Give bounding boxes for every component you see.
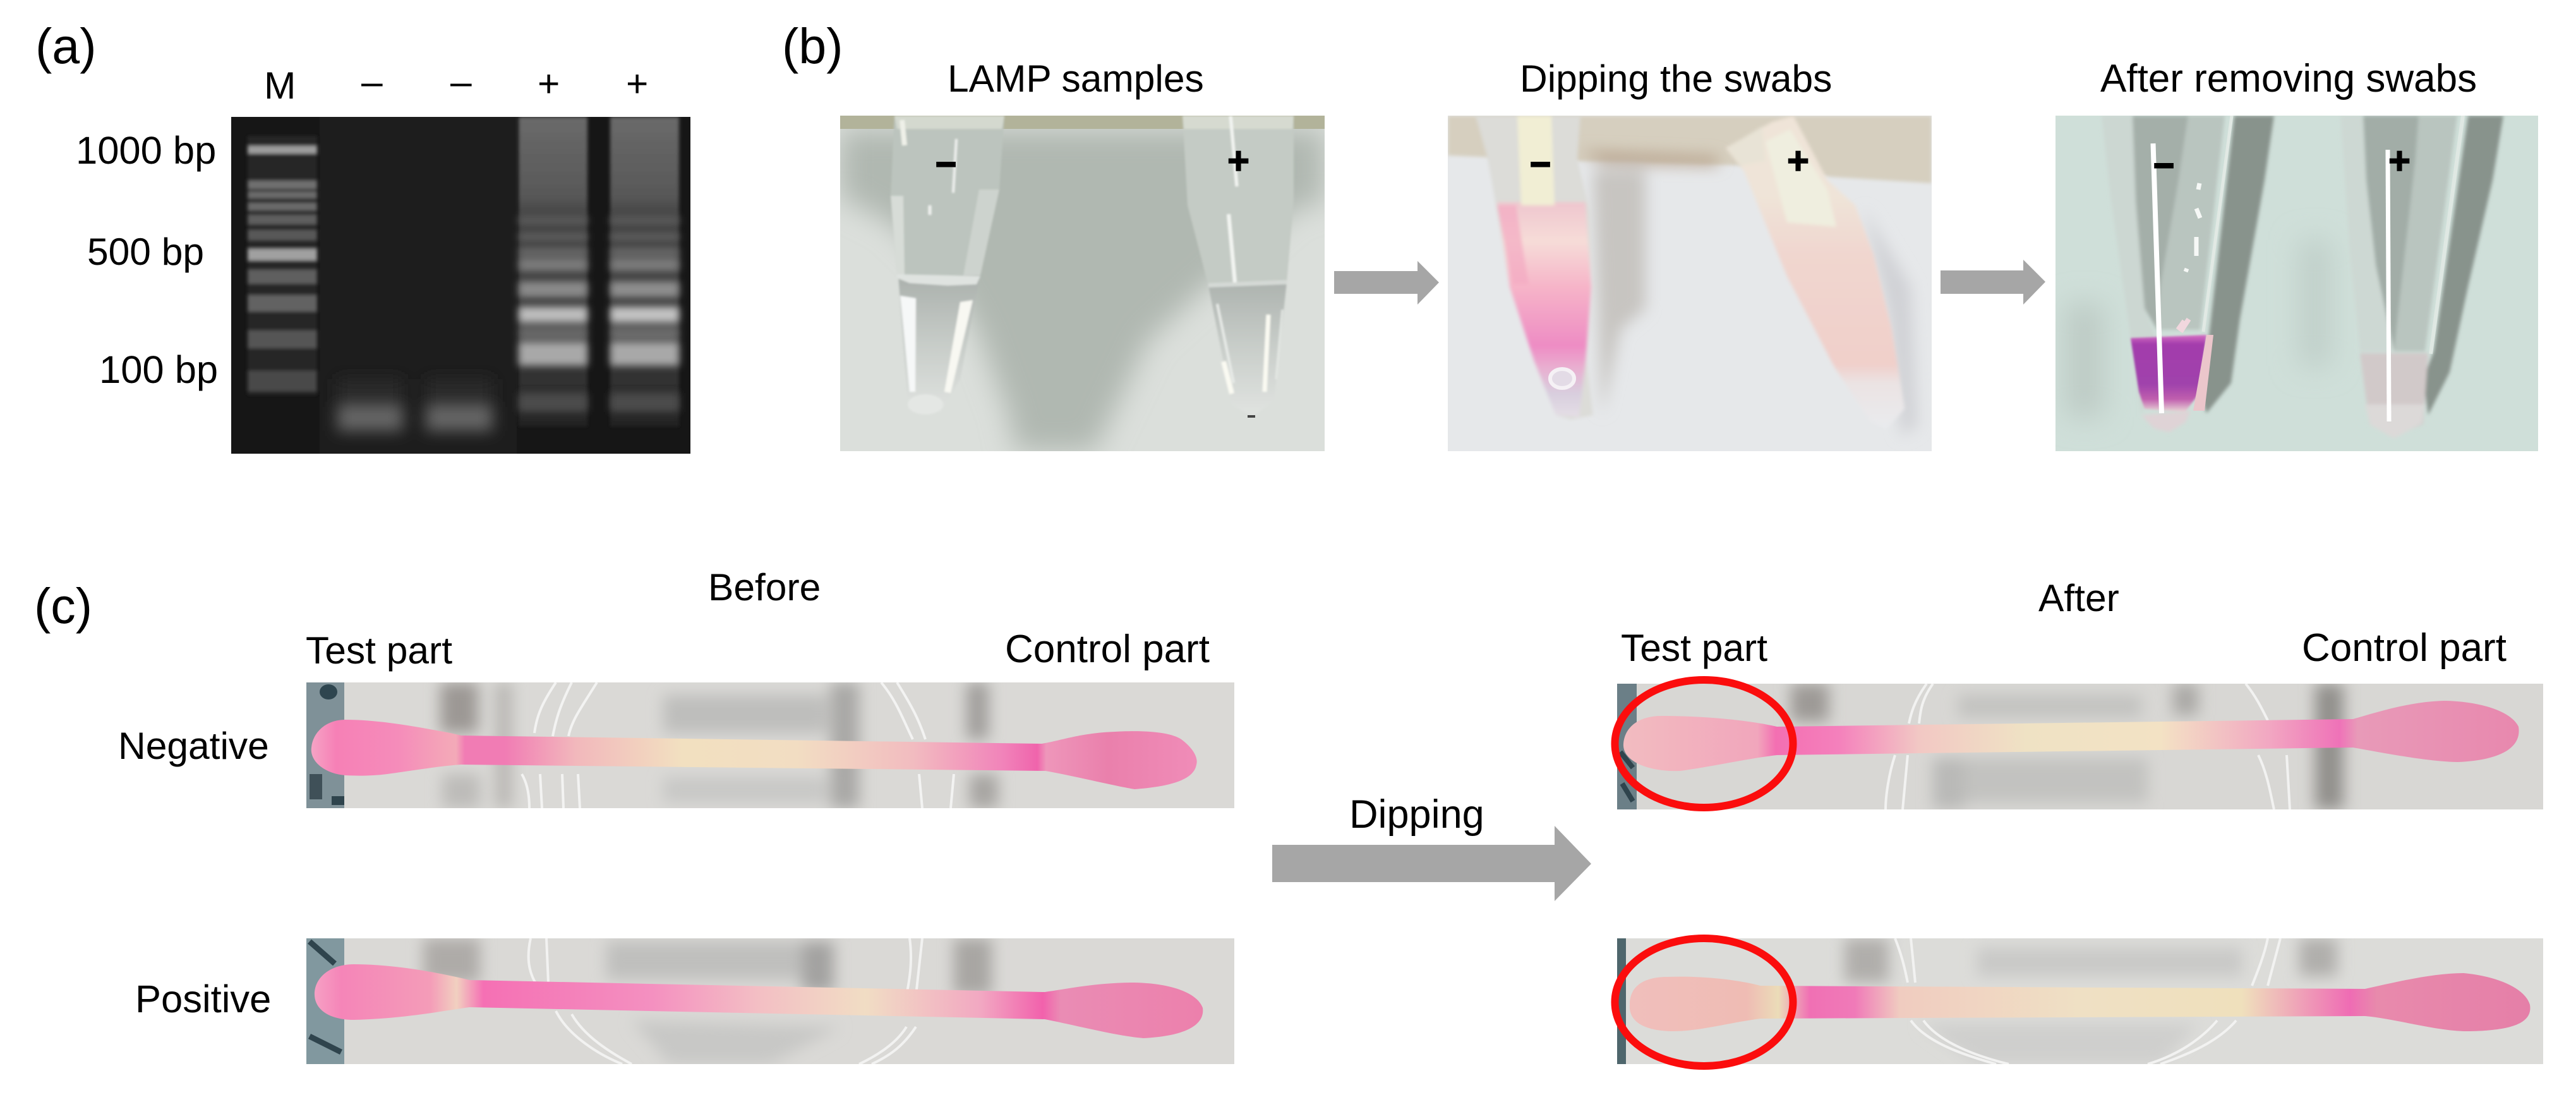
heading: Before: Before (708, 566, 821, 609)
swab photo: negative after (1617, 684, 2543, 809)
size ladder labels: 1000 bp (76, 129, 216, 173)
lane header labels: M (264, 64, 296, 107)
swab with pale test head (1630, 973, 2530, 1031)
tube sign minus: – (936, 142, 956, 181)
positive lane smears and ladder bands (519, 117, 679, 427)
red highlight circle: positive test part (1615, 938, 1793, 1066)
air bubble (1550, 369, 1574, 388)
positive tube with clear liquid (2340, 116, 2503, 439)
tan wall band (1448, 116, 1932, 183)
specimen holder strip (306, 938, 344, 1064)
process arrow 2 (1941, 260, 2045, 305)
tube sign plus: + (1227, 140, 1249, 182)
large dipping arrow (1272, 826, 1591, 901)
size ladder labels: 100 bp (99, 348, 218, 392)
shadows behind tubes (840, 130, 1325, 451)
photo heading: Dipping the swabs: Dipping the swabs (1520, 57, 1832, 100)
lane header labels: – (361, 60, 383, 103)
specimen holder strip (1617, 938, 1626, 1064)
panel label (a): (a) (35, 18, 97, 74)
swab photo: positive before (306, 938, 1234, 1064)
swab with pale test head (1623, 701, 2519, 771)
glass rim reflections (1895, 938, 2280, 1064)
panel label (b): (b) (782, 18, 843, 74)
swab photo: negative before (306, 682, 1234, 808)
tube sign plus: + (1787, 140, 1809, 182)
positive pale tube (1726, 116, 1905, 429)
row label: Negative: Negative (118, 724, 269, 767)
glass rim reflections (522, 682, 954, 808)
swab photo: positive after (1617, 938, 2543, 1064)
process arrow 1 (1334, 261, 1439, 305)
glass rim reflections (1886, 684, 2290, 809)
label: Control part (before): Control part (1005, 627, 1210, 671)
row label: Positive: Positive (135, 978, 271, 1021)
negative tube (891, 116, 1004, 415)
photo heading: After removing swabs: After removing swabs (2100, 57, 2477, 100)
label: Test part (after): Test part (1621, 626, 1767, 669)
photo: after removing swabs (2055, 116, 2538, 451)
negative lane primer smudges (337, 379, 493, 431)
positive tube (1183, 116, 1294, 417)
tan bench strip (840, 116, 1325, 129)
size ladder labels (76, 129, 218, 392)
tube speck (1248, 415, 1255, 418)
photo: LAMP sample tubes (840, 116, 1325, 451)
specimen holder strip (306, 682, 344, 808)
soft background patches (2066, 240, 2331, 417)
size ladder labels: 500 bp (87, 230, 204, 273)
lane header labels: + (538, 62, 560, 105)
photo: dipping the swabs (1448, 116, 1932, 451)
red highlight circle: negative test part (1615, 680, 1793, 808)
lane header labels: + (626, 62, 648, 105)
negative pink tube (1476, 116, 1593, 420)
label: Test part (before): Test part (306, 629, 452, 672)
specimen holder strip (1617, 684, 1637, 809)
heading: After: After (2038, 576, 2119, 619)
negative tube with purple liquid (2102, 116, 2274, 432)
glass rim reflections (529, 938, 922, 1064)
gel electrophoresis image (231, 117, 690, 454)
lane header labels: – (450, 60, 472, 103)
label: Control part (after): Control part (2302, 626, 2507, 670)
tube sign minus: – (1531, 142, 1550, 181)
photo heading: LAMP samples: LAMP samples (948, 57, 1204, 100)
pink cotton swab (311, 720, 1197, 789)
tube sign minus: – (2154, 143, 2174, 183)
arrow label: Dipping: Dipping (1349, 792, 1484, 837)
marker lane bands (248, 136, 317, 395)
lane header labels (264, 60, 648, 107)
pink cotton swab (315, 964, 1203, 1038)
panel label (c): (c) (34, 578, 92, 634)
tube sign plus: + (2388, 140, 2410, 182)
